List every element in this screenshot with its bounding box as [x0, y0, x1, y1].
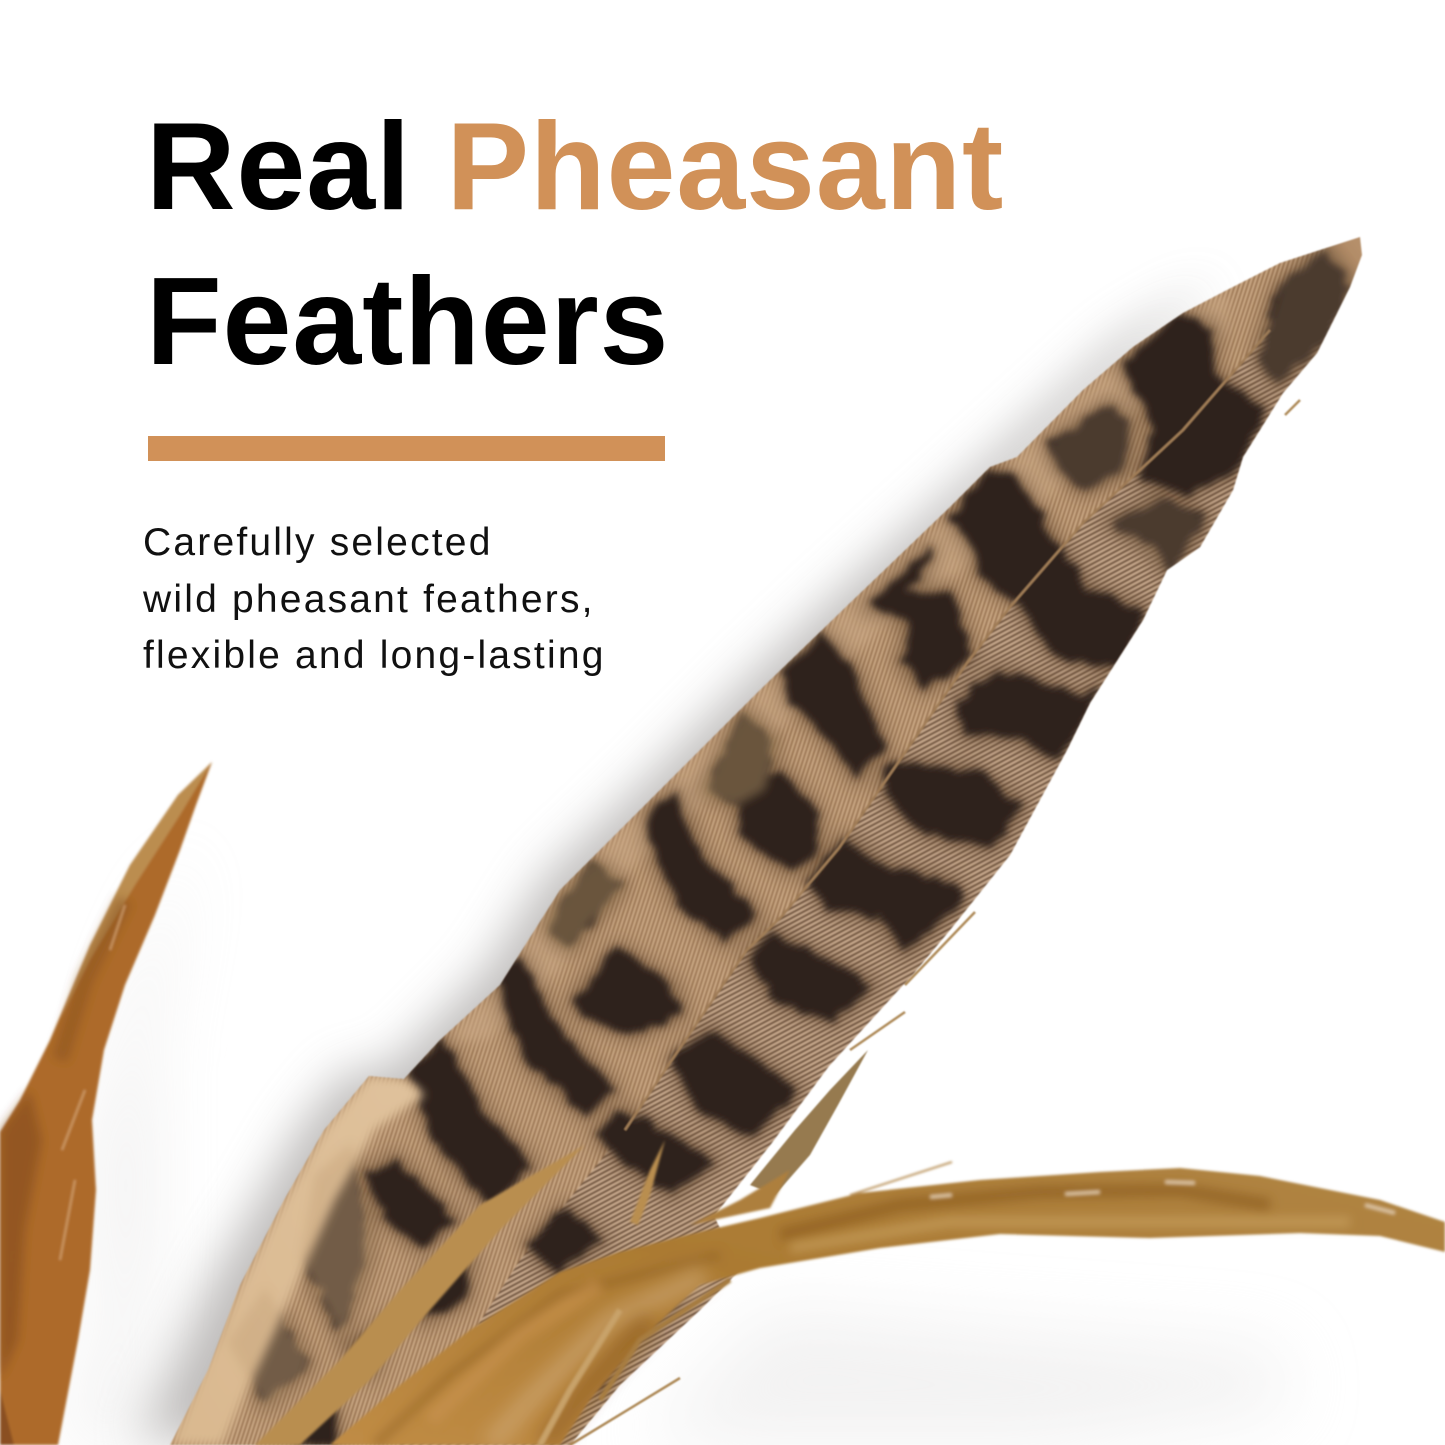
shadows [70, 281, 1290, 1445]
blotches [232, 247, 1352, 1445]
lightened tip blotches [1049, 251, 1349, 570]
blotch halos [232, 247, 1352, 1445]
right vane [484, 364, 1284, 1441]
description text: Carefully selected [143, 521, 493, 564]
title [146, 98, 1004, 391]
description text: flexible and long-lasting [143, 634, 606, 677]
lower fringe strip [750, 1050, 868, 1195]
pale upper rim [440, 290, 1230, 1044]
main feather [150, 220, 1380, 1445]
title line one: Real Pheasant [146, 98, 1004, 236]
left vane barbs [150, 220, 1380, 1445]
pale left base [170, 1076, 425, 1445]
lightened olive blotch [545, 708, 778, 952]
barb wisps [570, 400, 1300, 1445]
left small feather [0, 762, 212, 1445]
shaft [625, 330, 1270, 1130]
accent rule [148, 436, 665, 461]
title line two: Feathers [146, 253, 669, 391]
washed lower left blotches [228, 1142, 372, 1408]
description text: wild pheasant feathers, [143, 578, 595, 620]
long golden plume barbs [255, 1140, 1445, 1445]
description text [143, 521, 606, 677]
